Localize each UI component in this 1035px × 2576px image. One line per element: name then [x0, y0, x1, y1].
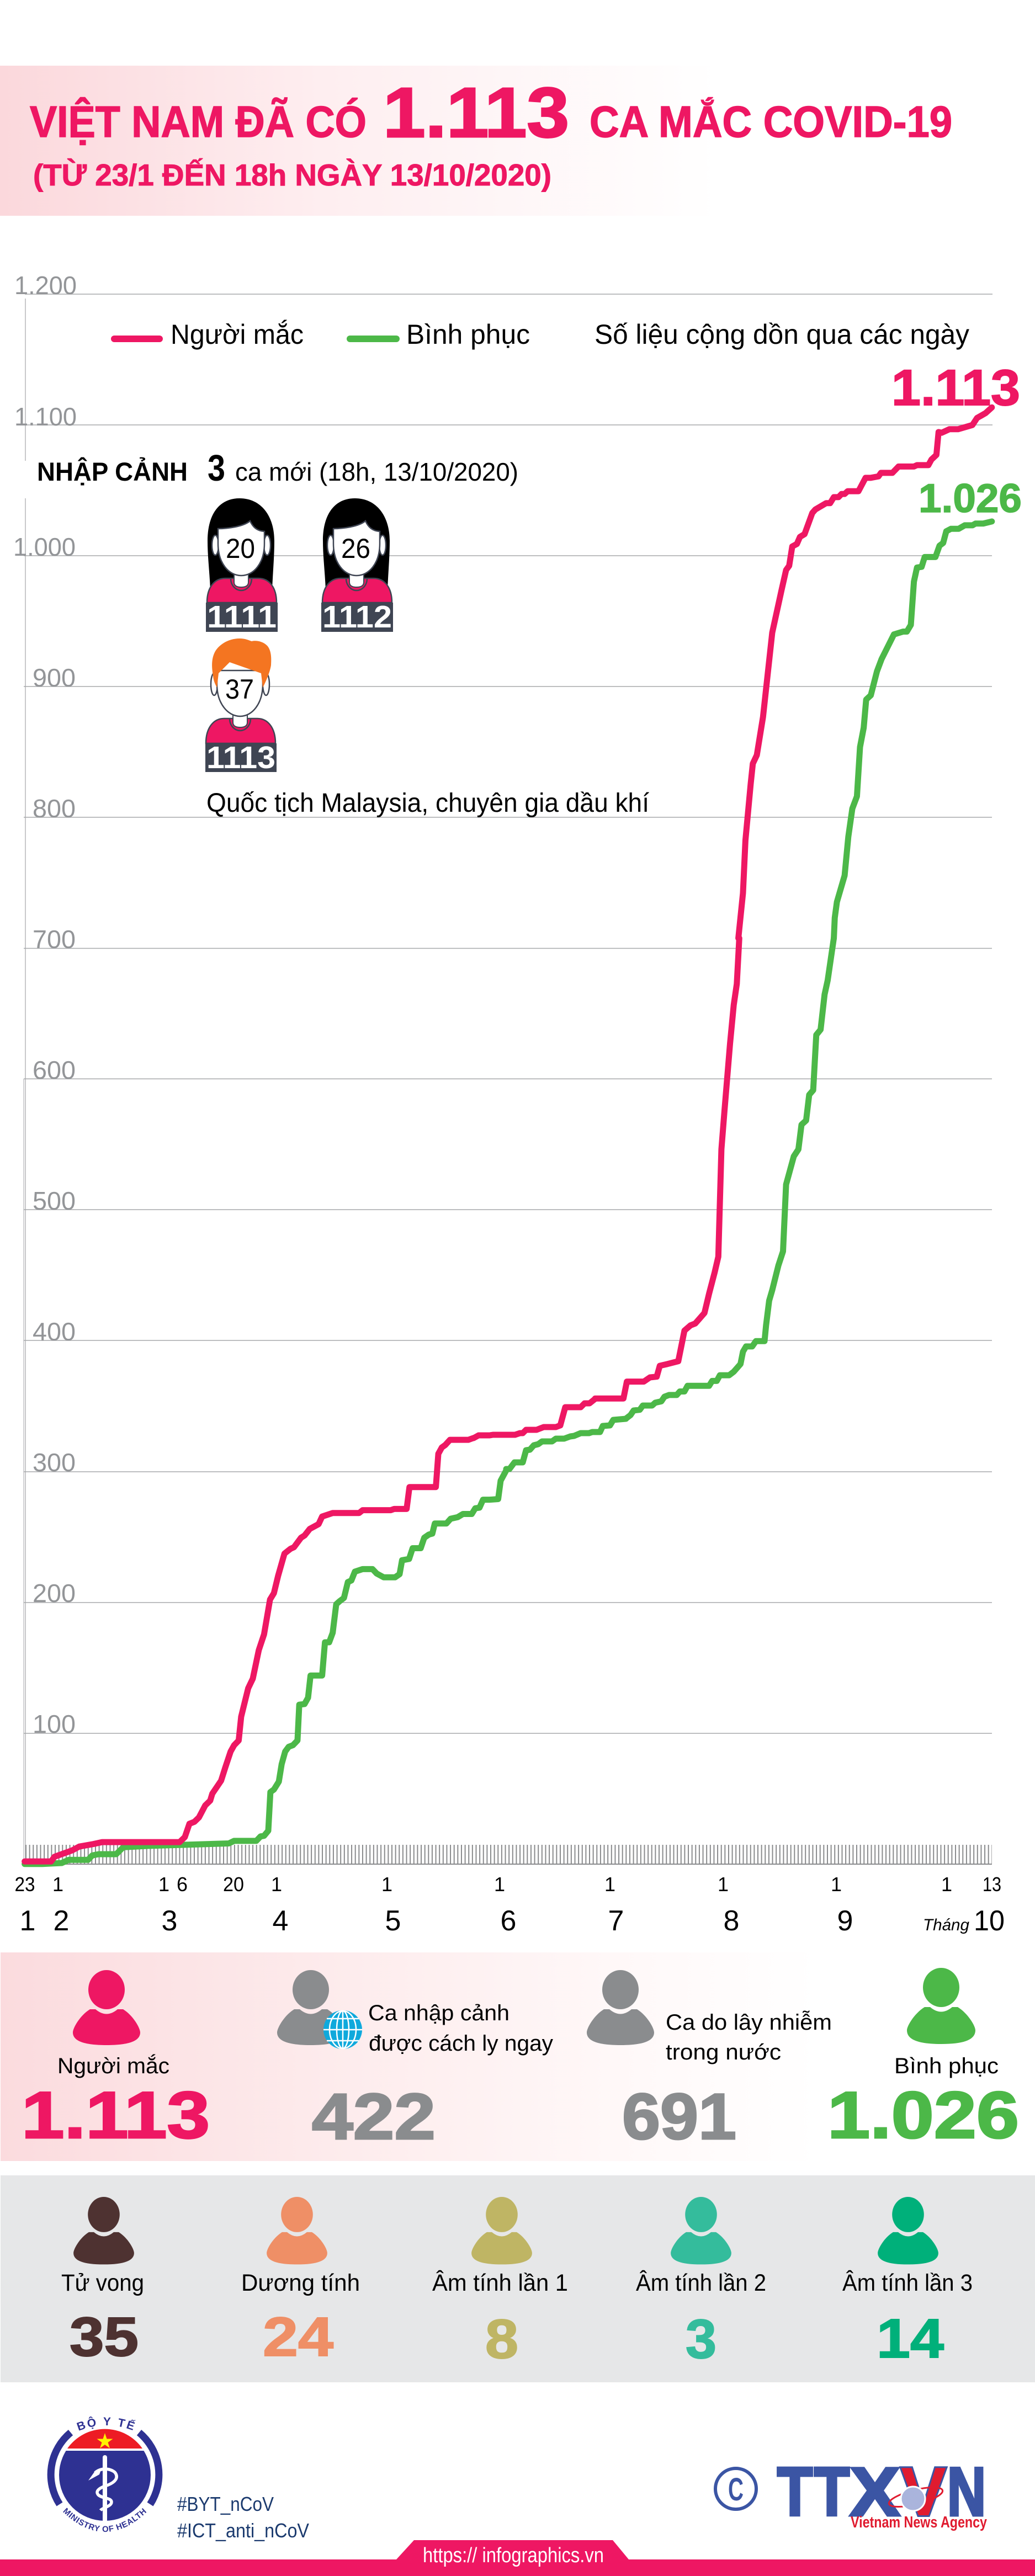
logo: TTXVN: Vietnam News Agency: [851, 2514, 987, 2531]
y axis labels: [13, 271, 77, 1738]
grid lines: [24, 294, 992, 1733]
new cases heading: 3: [208, 448, 225, 489]
icon: person khaki: [471, 2197, 532, 2264]
y axis labels: 100: [33, 1710, 76, 1738]
month labels: 3: [162, 1905, 177, 1937]
day labels: 23: [14, 1873, 35, 1896]
day labels: 1: [604, 1873, 615, 1896]
stat: deaths: 35: [70, 2306, 139, 2368]
day labels: 13: [983, 1873, 1001, 1896]
y axis line: [24, 299, 25, 1864]
end value: recovered: 1.026: [919, 476, 1022, 521]
patient note: Quốc tịch Malaysia, chuyên gia dầu khí: [206, 789, 650, 818]
icon: person orange: [267, 2197, 327, 2264]
y axis labels: 1.100: [14, 402, 77, 431]
icon: person brown: [73, 2197, 134, 2264]
stat: negative three times: [842, 2197, 973, 2370]
hashtags: #ICT_anti_nCoV: [177, 2519, 309, 2542]
stat: local cases: [587, 1970, 832, 2153]
logo: TTXVN: V: [901, 2454, 946, 2530]
new cases heading: ca mới (18h, 13/10/2020): [235, 457, 518, 486]
y axis labels: 900: [33, 663, 76, 692]
chart: cumulative cases line chart: [13, 271, 1005, 1937]
logo: Ministry of Health: BỘ Y TẾ: [76, 2416, 136, 2430]
title: CA MẮC COVID-19: [590, 97, 952, 146]
hashtags: #BYT_nCoV: [177, 2493, 274, 2515]
y axis labels: 200: [33, 1579, 76, 1608]
legend: recovered: Bình phục: [406, 319, 530, 350]
logo: TTXVN: [715, 2454, 987, 2531]
stat: negative twice: Âm tính lần 2: [636, 2270, 766, 2296]
day labels: 1: [271, 1873, 282, 1896]
stat: negative three times: 14: [877, 2308, 944, 2370]
stat: local cases: Ca do lây nhiễm: [666, 2010, 832, 2035]
month labels: Tháng: [923, 1916, 969, 1934]
patient 1113: 1113: [206, 740, 275, 775]
stat: negative twice: [636, 2197, 766, 2370]
day labels: 1: [158, 1873, 169, 1896]
icon: person green: [878, 2197, 938, 2264]
hashtags: [177, 2493, 309, 2542]
title: VIỆT NAM ĐÃ CÓ: [30, 97, 367, 146]
stat: positive: Dương tính: [241, 2270, 360, 2296]
day labels: 1: [831, 1873, 842, 1896]
day ticks: [24, 1854, 992, 1864]
legend: recovered: [347, 319, 530, 350]
y axis labels: 300: [33, 1448, 76, 1477]
y axis labels: 400: [33, 1317, 76, 1346]
day labels: 20: [223, 1873, 244, 1896]
stat: recovered: Bình phục: [894, 2054, 999, 2078]
panel: main totals: [1, 1952, 1019, 2161]
logo: TTXVN: X: [850, 2454, 900, 2530]
confirmed cases line: [25, 407, 992, 1861]
logo: TTXVN: T: [777, 2454, 813, 2530]
icon: person pink: [73, 1970, 140, 2045]
icon: person green: [907, 1968, 975, 2044]
end value: confirmed: 1.113: [891, 360, 1020, 416]
stat: positive: [241, 2197, 360, 2368]
stat: imported cases: được cách ly ngay: [369, 2031, 553, 2056]
stat: negative once: [432, 2197, 568, 2370]
y axis labels: 600: [33, 1056, 76, 1084]
legend: confirmed: Người mắc: [171, 319, 304, 350]
day labels: 1: [941, 1873, 952, 1896]
stat: confirmed: [22, 1970, 210, 2152]
logo: Ministry of Health: MINISTRY OF HEALTH: [63, 2508, 147, 2532]
stat: imported cases: [277, 1970, 553, 2153]
month labels: 1: [20, 1905, 35, 1937]
y axis labels: 800: [33, 794, 76, 823]
stat: local cases: trong nước: [666, 2040, 781, 2064]
stat: recovered: 1.026: [827, 2078, 1019, 2152]
day labels: 1: [381, 1873, 392, 1896]
title panel: [0, 66, 952, 216]
day labels: 6: [177, 1873, 188, 1896]
icon: globe: [323, 2010, 362, 2049]
panel: treatment status: [1, 2175, 1035, 2382]
legend: confirmed: [111, 319, 304, 350]
month labels: 8: [724, 1905, 739, 1937]
patient 1112: 1112: [322, 599, 392, 635]
icon: person teal: [671, 2197, 731, 2264]
day labels: [14, 1873, 1001, 1896]
new cases heading: NHẬP CẢNH: [37, 457, 188, 486]
day labels: 1: [718, 1873, 729, 1896]
legend note: Số liệu cộng dồn qua các ngày: [595, 319, 969, 350]
legend: [111, 319, 969, 350]
y axis labels: 1.200: [14, 271, 77, 300]
patient 1113: [205, 638, 277, 775]
y axis labels: 500: [33, 1186, 76, 1215]
month labels: 7: [608, 1905, 624, 1937]
stat: confirmed: 1.113: [22, 2078, 210, 2152]
stat: negative once: 8: [485, 2308, 518, 2370]
month labels: 5: [385, 1905, 401, 1937]
stat: positive: 24: [263, 2306, 333, 2368]
y axis labels: 700: [33, 925, 76, 954]
copyright mark: [715, 2468, 756, 2509]
month labels: 10: [974, 1905, 1005, 1937]
stat: negative twice: 3: [686, 2308, 716, 2370]
y axis labels: 1.000: [13, 533, 76, 561]
patient 1112: [321, 498, 393, 635]
logo: TTXVN: N: [947, 2454, 986, 2530]
icon: person gray: [587, 1970, 654, 2045]
month labels: 4: [273, 1905, 288, 1937]
recovered line: [25, 521, 992, 1864]
stat: negative once: Âm tính lần 1: [432, 2270, 568, 2296]
website url: https:// infographics.vn: [423, 2544, 604, 2567]
icon: person gray: [277, 1970, 344, 2045]
day labels: 1: [52, 1873, 63, 1896]
patient 1113: 37: [225, 674, 254, 705]
patient 1111: 20: [226, 533, 255, 564]
month labels: 2: [54, 1905, 69, 1937]
title: 1.113: [383, 73, 569, 152]
subtitle: (TỪ 23/1 ĐẾN 18h NGÀY 13/10/2020): [33, 158, 551, 192]
month labels: [20, 1905, 1005, 1937]
new cases heading: [37, 448, 518, 489]
patient 1112: 26: [341, 533, 370, 564]
logo: Ministry of Health: [47, 2416, 162, 2532]
month labels: 6: [501, 1905, 516, 1937]
month labels: 9: [837, 1905, 853, 1937]
stat: negative three times: Âm tính lần 3: [842, 2270, 973, 2296]
stat: imported cases: 422: [312, 2080, 436, 2153]
stat: local cases: 691: [622, 2080, 736, 2153]
day labels: 1: [494, 1873, 505, 1896]
stat: deaths: Tử vong: [61, 2270, 144, 2296]
stat: confirmed: Người mắc: [57, 2053, 169, 2078]
title: [30, 73, 952, 152]
patient 1111: [206, 498, 278, 635]
logo: TTXVN: T: [814, 2454, 850, 2530]
stat: recovered: [827, 1968, 1019, 2152]
stat: deaths: [61, 2197, 144, 2368]
patient 1111: 1111: [207, 599, 277, 635]
stat: imported cases: Ca nhập cảnh: [368, 2001, 509, 2025]
copyright mark: C: [728, 2472, 744, 2508]
footer bar: [0, 2540, 1035, 2576]
